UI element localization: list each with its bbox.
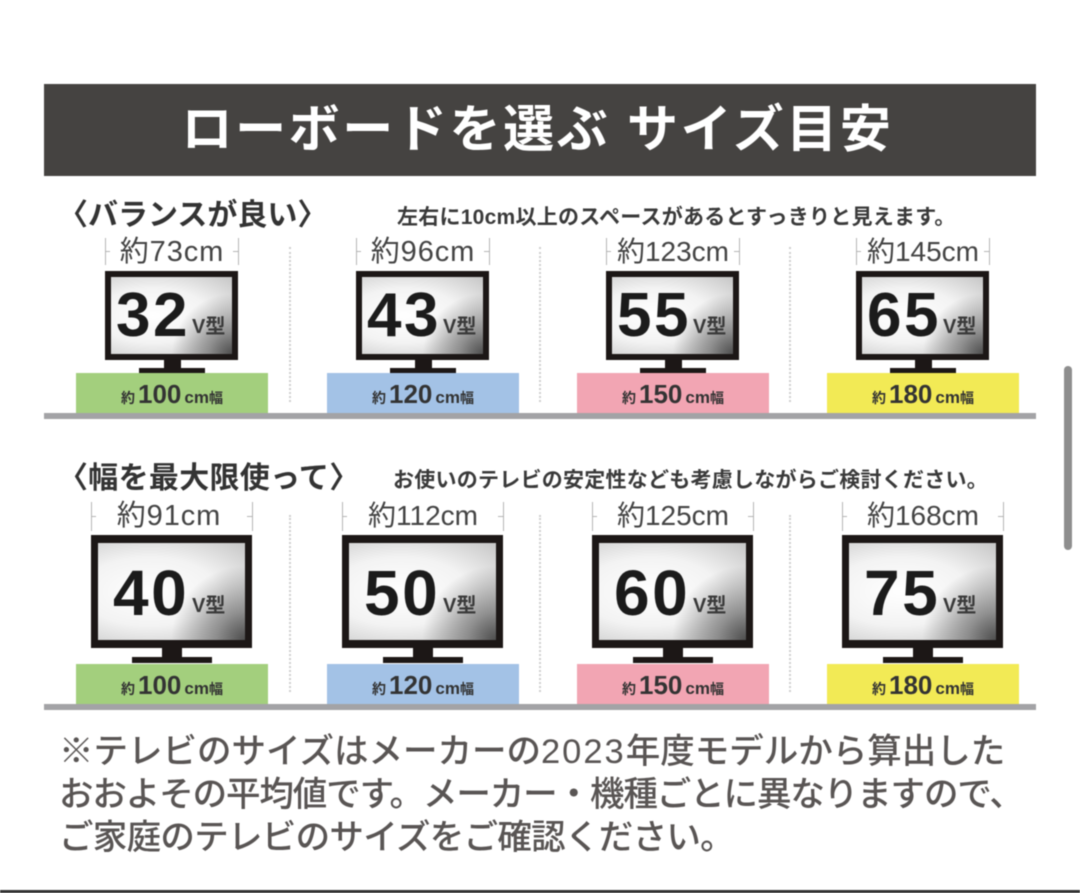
section note: full width: お使いのテレビの安定性なども考慮しながらご検討ください。 <box>393 469 988 492</box>
unit: 50V on 120cm: 約120cm幅 <box>372 670 474 700</box>
section note: balance: 左右に10cm以上のスペースがあるとすっきりと見えます。 <box>397 206 956 229</box>
unit: 50V on 120cm: 50 <box>364 557 440 629</box>
footnote <box>59 732 1023 857</box>
unit: 55V on 150cm: V型 <box>693 316 726 338</box>
unit: 75V on 180cm: 75 <box>864 557 940 629</box>
unit: 55V on 150cm: 55 <box>617 281 691 350</box>
unit: 65V on 180cm: 65 <box>867 281 941 350</box>
unit: 43V on 120cm: 約96cm <box>371 236 475 268</box>
section heading: balance: 〈バランスが良い〉 <box>58 199 327 232</box>
section heading: full width: 〈幅を最大限使って〉 <box>58 462 360 495</box>
unit: 50V on 120cm: 約112cm <box>368 500 478 531</box>
unit: 32V on 100cm: 32 <box>116 281 190 350</box>
unit: 50V on 120cm: V型 <box>443 595 476 617</box>
unit: 75V on 180cm: 約168cm <box>867 500 979 531</box>
unit: 32V on 100cm: 約73cm <box>120 236 224 268</box>
unit: 40V on 100cm <box>75 500 269 705</box>
unit: 65V on 180cm: V型 <box>943 316 976 338</box>
title banner <box>44 84 1036 176</box>
unit: 60V on 150cm: V型 <box>693 595 726 617</box>
shelf line bottom <box>44 704 1036 710</box>
unit: 55V on 150cm: 約150cm幅 <box>622 379 724 409</box>
unit: 32V on 100cm <box>75 236 269 414</box>
scrollbar <box>1064 366 1072 550</box>
separators top row <box>289 247 291 402</box>
unit: 75V on 180cm <box>826 500 1020 705</box>
unit: 60V on 150cm <box>576 500 770 704</box>
separators bottom row <box>289 515 291 692</box>
unit: 32V on 100cm: V型 <box>192 316 225 338</box>
unit: 60V on 150cm: 約125cm <box>617 500 729 531</box>
shelf line top <box>44 413 1036 419</box>
unit: 65V on 180cm <box>826 236 1020 414</box>
footnote: おおよその平均値です。メーカー・機種ごとに異なりますので、 <box>59 776 1023 814</box>
unit: 55V on 150cm <box>576 236 770 414</box>
unit: 65V on 180cm: 約145cm <box>867 236 979 267</box>
unit: 43V on 120cm: 約120cm幅 <box>372 379 474 409</box>
footnote: ※テレビのサイズはメーカーの2023年度モデルから算出した <box>59 733 1005 771</box>
unit: 43V on 120cm <box>326 236 520 414</box>
title banner: ローボードを選ぶ サイズ目安 <box>181 101 894 158</box>
footnote: ご家庭のテレビのサイズをご確認ください。 <box>59 819 734 857</box>
unit: 32V on 100cm: 約100cm幅 <box>121 379 223 409</box>
bottom edge line <box>0 890 1080 893</box>
unit: 40V on 100cm: 約100cm幅 <box>121 670 223 700</box>
unit: 60V on 150cm: 60 <box>614 557 690 629</box>
unit: 40V on 100cm: 約91cm <box>117 500 221 532</box>
unit: 75V on 180cm: V型 <box>943 595 976 617</box>
unit: 40V on 100cm: V型 <box>192 595 225 617</box>
unit: 75V on 180cm: 約180cm幅 <box>872 670 974 700</box>
unit: 60V on 150cm: 約150cm幅 <box>622 670 724 700</box>
unit: 50V on 120cm <box>326 500 520 704</box>
unit: 43V on 120cm: 43 <box>367 281 441 350</box>
unit: 43V on 120cm: V型 <box>443 316 476 338</box>
unit: 65V on 180cm: 約180cm幅 <box>872 379 974 409</box>
unit: 55V on 150cm: 約123cm <box>617 236 729 267</box>
unit: 40V on 100cm: 40 <box>113 557 189 629</box>
